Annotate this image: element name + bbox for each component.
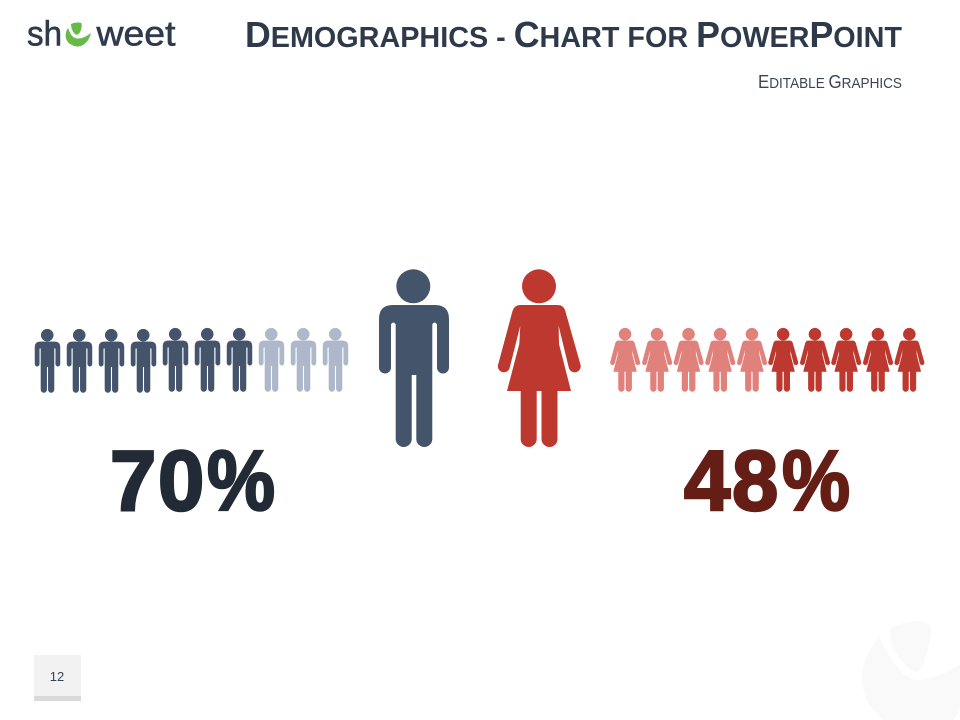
statistic: 70%: 0 <box>158 433 204 528</box>
title: DEMOGRAPHICS - CHART FOR POWERPOINT <box>245 14 902 55</box>
page number box <box>34 655 81 701</box>
row of ten small men: 70% <box>35 328 348 393</box>
statistic: 70% <box>110 433 275 529</box>
row of ten small women: 48% <box>610 328 924 392</box>
statistic: 48%: 4 <box>684 433 731 528</box>
statistic: 48% <box>684 433 850 529</box>
watermark logo <box>862 621 960 720</box>
statistic: 70%: 7 <box>110 433 156 528</box>
logo: showeet <box>27 14 176 54</box>
subtitle: EDITABLE GRAPHICS <box>758 72 902 92</box>
statistic: 48%: 8 <box>732 433 778 528</box>
statistic: 70%: % <box>207 434 275 529</box>
large man icon <box>379 269 449 447</box>
statistic: 48%: % <box>782 434 850 529</box>
page number: 12 <box>50 669 64 684</box>
logo text: sh: sh <box>27 14 62 54</box>
logo icon: green crescent and drop <box>66 22 91 46</box>
logo text: weet: weet <box>95 14 176 54</box>
large woman icon <box>498 269 581 447</box>
